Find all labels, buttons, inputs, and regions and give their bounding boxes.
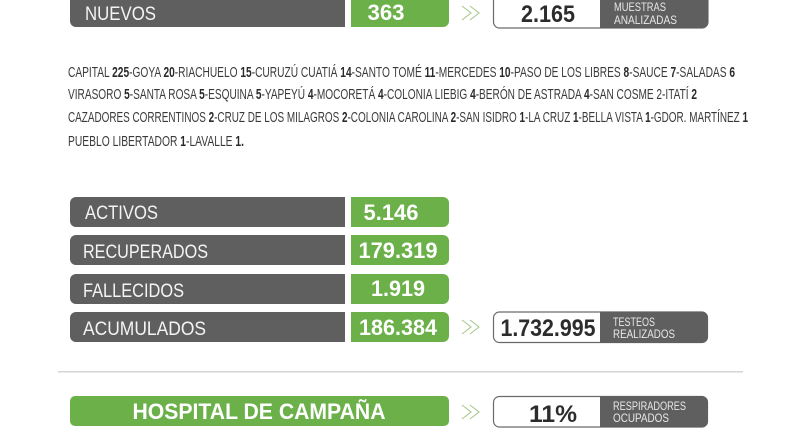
row: acumulados: ACUMULADOS: [83, 318, 206, 340]
banner: hospital de campaña: [70, 396, 449, 426]
arrow: acumulados to testeos: [462, 320, 479, 334]
row: nuevos: [70, 0, 449, 27]
box: testeos realizados: 1.732.995: [500, 315, 596, 342]
divider: [58, 371, 743, 372]
arrow: nuevos to muestras: [462, 6, 479, 20]
banner: hospital de campaña: HOSPITAL DE CAMPAÑA: [132, 399, 386, 424]
box: testeos realizados: [494, 312, 708, 343]
row: activos: 5.146: [364, 200, 418, 225]
arrow: hospital to respiradores: [462, 405, 479, 419]
box: testeos realizados: TESTEOS: [613, 315, 655, 329]
row: activos: ACTIVOS: [85, 202, 158, 224]
row: fallecidos: [70, 274, 449, 304]
row: acumulados: 186.384: [359, 315, 437, 340]
box: testeos realizados: REALIZADOS: [613, 327, 675, 341]
text block: casos por localidad: CAZADORES CORRENTINOS 2-CRUZ DE LOS MILAGROS 2-COLONIA CAROLINA 2-SAN ISIDRO 1-LA CRUZ 1-BELLA VISTA 1-GDOR. MARTÍNEZ 1: [68, 109, 748, 126]
box: muestras analizadas: MUESTRAS: [614, 0, 666, 14]
text block: casos por localidad: VIRASORO 5-SANTA ROSA 5-ESQUINA 5-YAPEYÚ 4-MOCORETÁ 4-COLONIA LIEBIG 4-BERÓN DE ASTRADA 4-SAN COSME 2-ITATÍ 2: [68, 86, 697, 103]
box: muestras analizadas: [494, 0, 708, 28]
text block: casos por localidad: [68, 64, 748, 150]
row: fallecidos: FALLECIDOS: [83, 280, 184, 302]
box: respiradores ocupados: OCUPADOS: [613, 411, 669, 425]
row: nuevos: NUEVOS: [85, 3, 156, 25]
text block: casos por localidad: PUEBLO LIBERTADOR 1-LAVALLE 1.: [68, 133, 244, 150]
box: muestras analizadas: ANALIZADAS: [614, 13, 677, 27]
row: recuperados: [70, 235, 449, 265]
box: respiradores ocupados: RESPIRADORES: [613, 399, 686, 413]
box: muestras analizadas: 2.165: [521, 1, 575, 28]
text block: casos por localidad: CAPITAL 225-GOYA 20-RIACHUELO 15-CURUZÚ CUATIÁ 14-SANTO TOMÉ 11-MERCEDES 10-PASO DE LOS LIBRES 8-SAUCE 7-SALADAS 6: [68, 64, 735, 81]
box: respiradores ocupados: [494, 396, 708, 428]
row: acumulados: [70, 312, 449, 342]
row: fallecidos: 1.919: [371, 276, 425, 301]
row: nuevos: 363: [368, 0, 404, 25]
row: activos: [70, 197, 449, 227]
box: respiradores ocupados: 11%: [529, 401, 577, 428]
row: recuperados: RECUPERADOS: [83, 241, 208, 263]
row: recuperados: 179.319: [358, 238, 438, 263]
